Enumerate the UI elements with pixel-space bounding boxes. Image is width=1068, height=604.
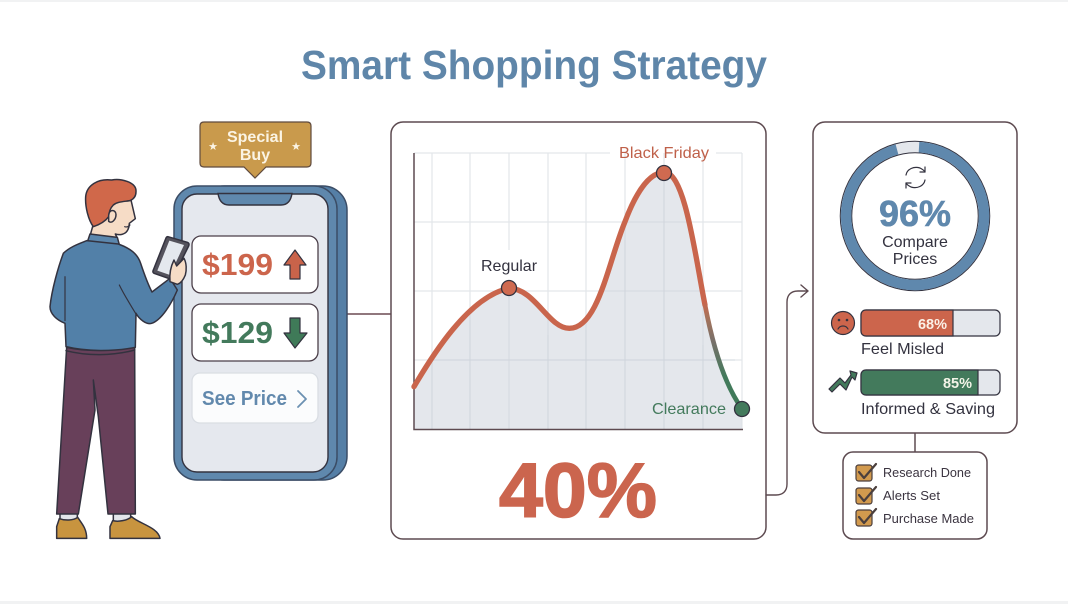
stat: 96%: 96% [879, 193, 951, 234]
metric: feel misled [832, 310, 1000, 358]
icon: sweater [50, 241, 177, 351]
label: black friday: Black Friday [619, 145, 709, 162]
icon: handheld phone [153, 237, 189, 279]
icon: collar [87, 234, 119, 245]
title: Smart Shopping Strategy [301, 42, 767, 88]
icon: sad face [832, 312, 854, 334]
bar: 68%: 68% [918, 317, 947, 333]
donut: 96% compare prices [846, 147, 984, 285]
phone mockup [174, 186, 347, 480]
badge: special buy: Buy [240, 147, 270, 164]
icon: stars: ★ [291, 140, 301, 153]
item: purchase made [856, 509, 974, 526]
phone body [174, 186, 337, 480]
panel: price chart [391, 122, 766, 539]
label: informed and saving: Informed & Saving [861, 401, 995, 418]
marker: black friday [656, 166, 672, 180]
bar: 85%: 85% [943, 376, 972, 392]
label: compare prices: Compare [882, 234, 948, 251]
icon: stars [208, 140, 301, 153]
item: research done [856, 464, 971, 481]
price card: $199: $199 [202, 247, 273, 282]
panel: checklist [843, 452, 987, 539]
label: feel misled: Feel Misled [861, 341, 944, 358]
icon: down arrow [284, 318, 307, 348]
label: regular: Regular [481, 258, 538, 275]
chart: price curve [414, 145, 750, 430]
item: research done: Research Done [883, 466, 971, 480]
item: alerts set [856, 487, 941, 504]
icon: refresh [906, 167, 925, 188]
stat: 40%: 40% [499, 448, 657, 534]
bar: 85% [861, 370, 1000, 395]
connector: phone to chart [347, 313, 391, 315]
icon: hand [170, 258, 186, 284]
panel: stats [813, 122, 1017, 433]
label: clearance: Clearance [652, 401, 726, 418]
curve line [414, 172, 705, 387]
area under curve [414, 172, 742, 429]
illustration: person holding phone [50, 180, 189, 538]
icon: shoes [57, 517, 160, 538]
button: see price [192, 373, 318, 423]
icon: chevron [298, 391, 306, 407]
button: see price: See Price [202, 388, 287, 410]
phone back edge [200, 186, 347, 480]
price card: $129: $129 [202, 315, 273, 350]
bar: 68% [861, 310, 1000, 336]
icon: socks [60, 513, 131, 522]
donut: 96% compare prices: Prices [893, 251, 937, 268]
icon: ear [109, 210, 116, 222]
phone screen [182, 194, 328, 472]
icon: trousers [57, 346, 135, 514]
icon: neck and face [90, 197, 135, 238]
icon: up arrow [284, 250, 306, 279]
badge: special buy [200, 122, 311, 178]
connector: stats to checklist [914, 433, 916, 452]
arrow: chart to stats [766, 285, 808, 495]
icon: trend arrow [829, 371, 857, 392]
metric: informed and saving [829, 370, 1000, 418]
curve tail [705, 305, 742, 408]
item: purchase made: Purchase Made [883, 512, 974, 526]
marker: clearance [734, 402, 750, 416]
axes [414, 153, 743, 430]
price card: $129 [192, 304, 318, 361]
marker: regular [502, 280, 516, 296]
icon: stars: ★ [208, 140, 218, 153]
icon: hair [86, 180, 136, 227]
item: alerts set: Alerts Set [883, 489, 941, 503]
price card: $199 [192, 236, 318, 293]
phone notch [218, 194, 292, 205]
badge: special buy: Special [227, 129, 283, 146]
